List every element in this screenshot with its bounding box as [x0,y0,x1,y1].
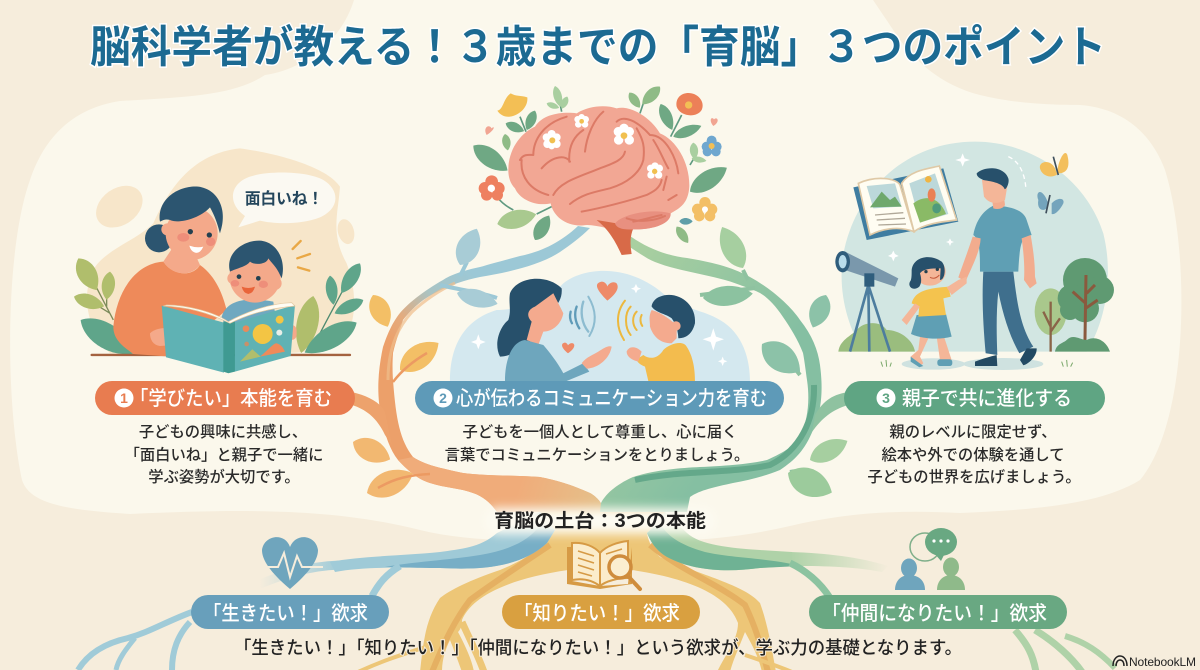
body text 1: 「面白いね」と親子で一緒に [125,447,323,464]
root: yellow centre [358,512,792,670]
pill heading 3 [844,381,1105,415]
brain body [508,106,689,255]
pill: belong [809,595,1067,629]
mother [113,187,227,357]
panel: 1 learning instinct [70,148,366,486]
icon: heart with pulse [257,537,323,589]
body text 1: 子どもの興味に共感し、 [139,423,307,441]
body text 2 [445,424,749,464]
butterflies [1037,153,1068,214]
pill heading 2: 心が伝わるコミュニケーション力を育む [456,387,767,410]
instinct: know [502,541,700,629]
pill heading 1: 「学びたい」本能を育む [130,387,332,410]
white flowers on brain [543,114,663,179]
pill: live: 「生きたい！」欲求 [203,602,368,625]
leaves around brain [468,83,732,246]
root: blue left [78,512,555,670]
pill: know [502,595,700,629]
instinct: live [191,537,389,629]
trees [881,258,1114,367]
illustration: parent and child talking [450,271,750,381]
caption: 「生きたい！」「知りたい！」「仲間になりたい！」という欲求が、学ぶ力の基礎となります。 [234,637,962,658]
illustration: brain with flowers [468,83,732,255]
flowers [479,93,722,221]
pill heading 3: 親子で共に進化する [902,387,1072,410]
pill heading 3: 3 [882,390,890,406]
icon: book with magnifier [567,541,640,589]
boy [222,241,297,340]
pill heading 2 [415,381,784,415]
plants [70,254,366,364]
body text 2: 言葉でコミュニケーションをとりましょう。 [445,447,749,464]
child [627,295,695,381]
logo: NotebookLM: NotebookLM [1129,655,1196,669]
daughter [902,257,967,367]
illustration: mother and boy reading [70,148,366,373]
root: left upper tree [348,224,602,512]
speech bubble [233,173,335,271]
pill: know: 「知りたい！」欲求 [514,602,680,625]
father [958,168,1037,366]
pill heading 1: 1 [120,390,128,406]
book [162,303,295,373]
illustration: father and daughter [835,142,1114,370]
root: right upper tree [600,222,852,512]
root: green right [647,512,1115,670]
pill: belong: 「仲間になりたい！」欲求 [822,602,1047,625]
body text 3: 親のレベルに限定せず、 [889,424,1057,441]
open book [853,166,958,240]
body text 3: 絵本や外での体験を通して [881,447,1065,464]
root system: upper tree and lower roots [78,222,1115,670]
instinct: belong [809,528,1067,629]
body text 3 [867,424,1081,486]
pill heading 2: 2 [439,390,447,406]
sound waves and hearts [562,282,642,353]
sub heading: foundation: 育脳の土台：3つの本能 [494,510,706,532]
woman [497,279,612,381]
panel: 3 evolve together [835,142,1114,486]
speech bubble: 面白いね！ [245,190,323,208]
body text 3: 子どもの世界を広げましょう。 [867,469,1081,486]
body text 2: 子どもを一個人として尊重し、心に届く [463,424,737,441]
panel: 2 communication [415,271,784,464]
body text 1 [125,423,323,486]
sparkles [888,153,970,261]
pill heading 1 [95,381,355,415]
icon: two people talking [895,528,965,590]
pill: live [191,595,389,629]
body text 1: 学ぶ姿勢が大切です。 [148,468,300,486]
telescope [835,251,898,352]
title: 脳科学者が教える！３歳までの「育脳」３つのポイント [90,23,1106,72]
